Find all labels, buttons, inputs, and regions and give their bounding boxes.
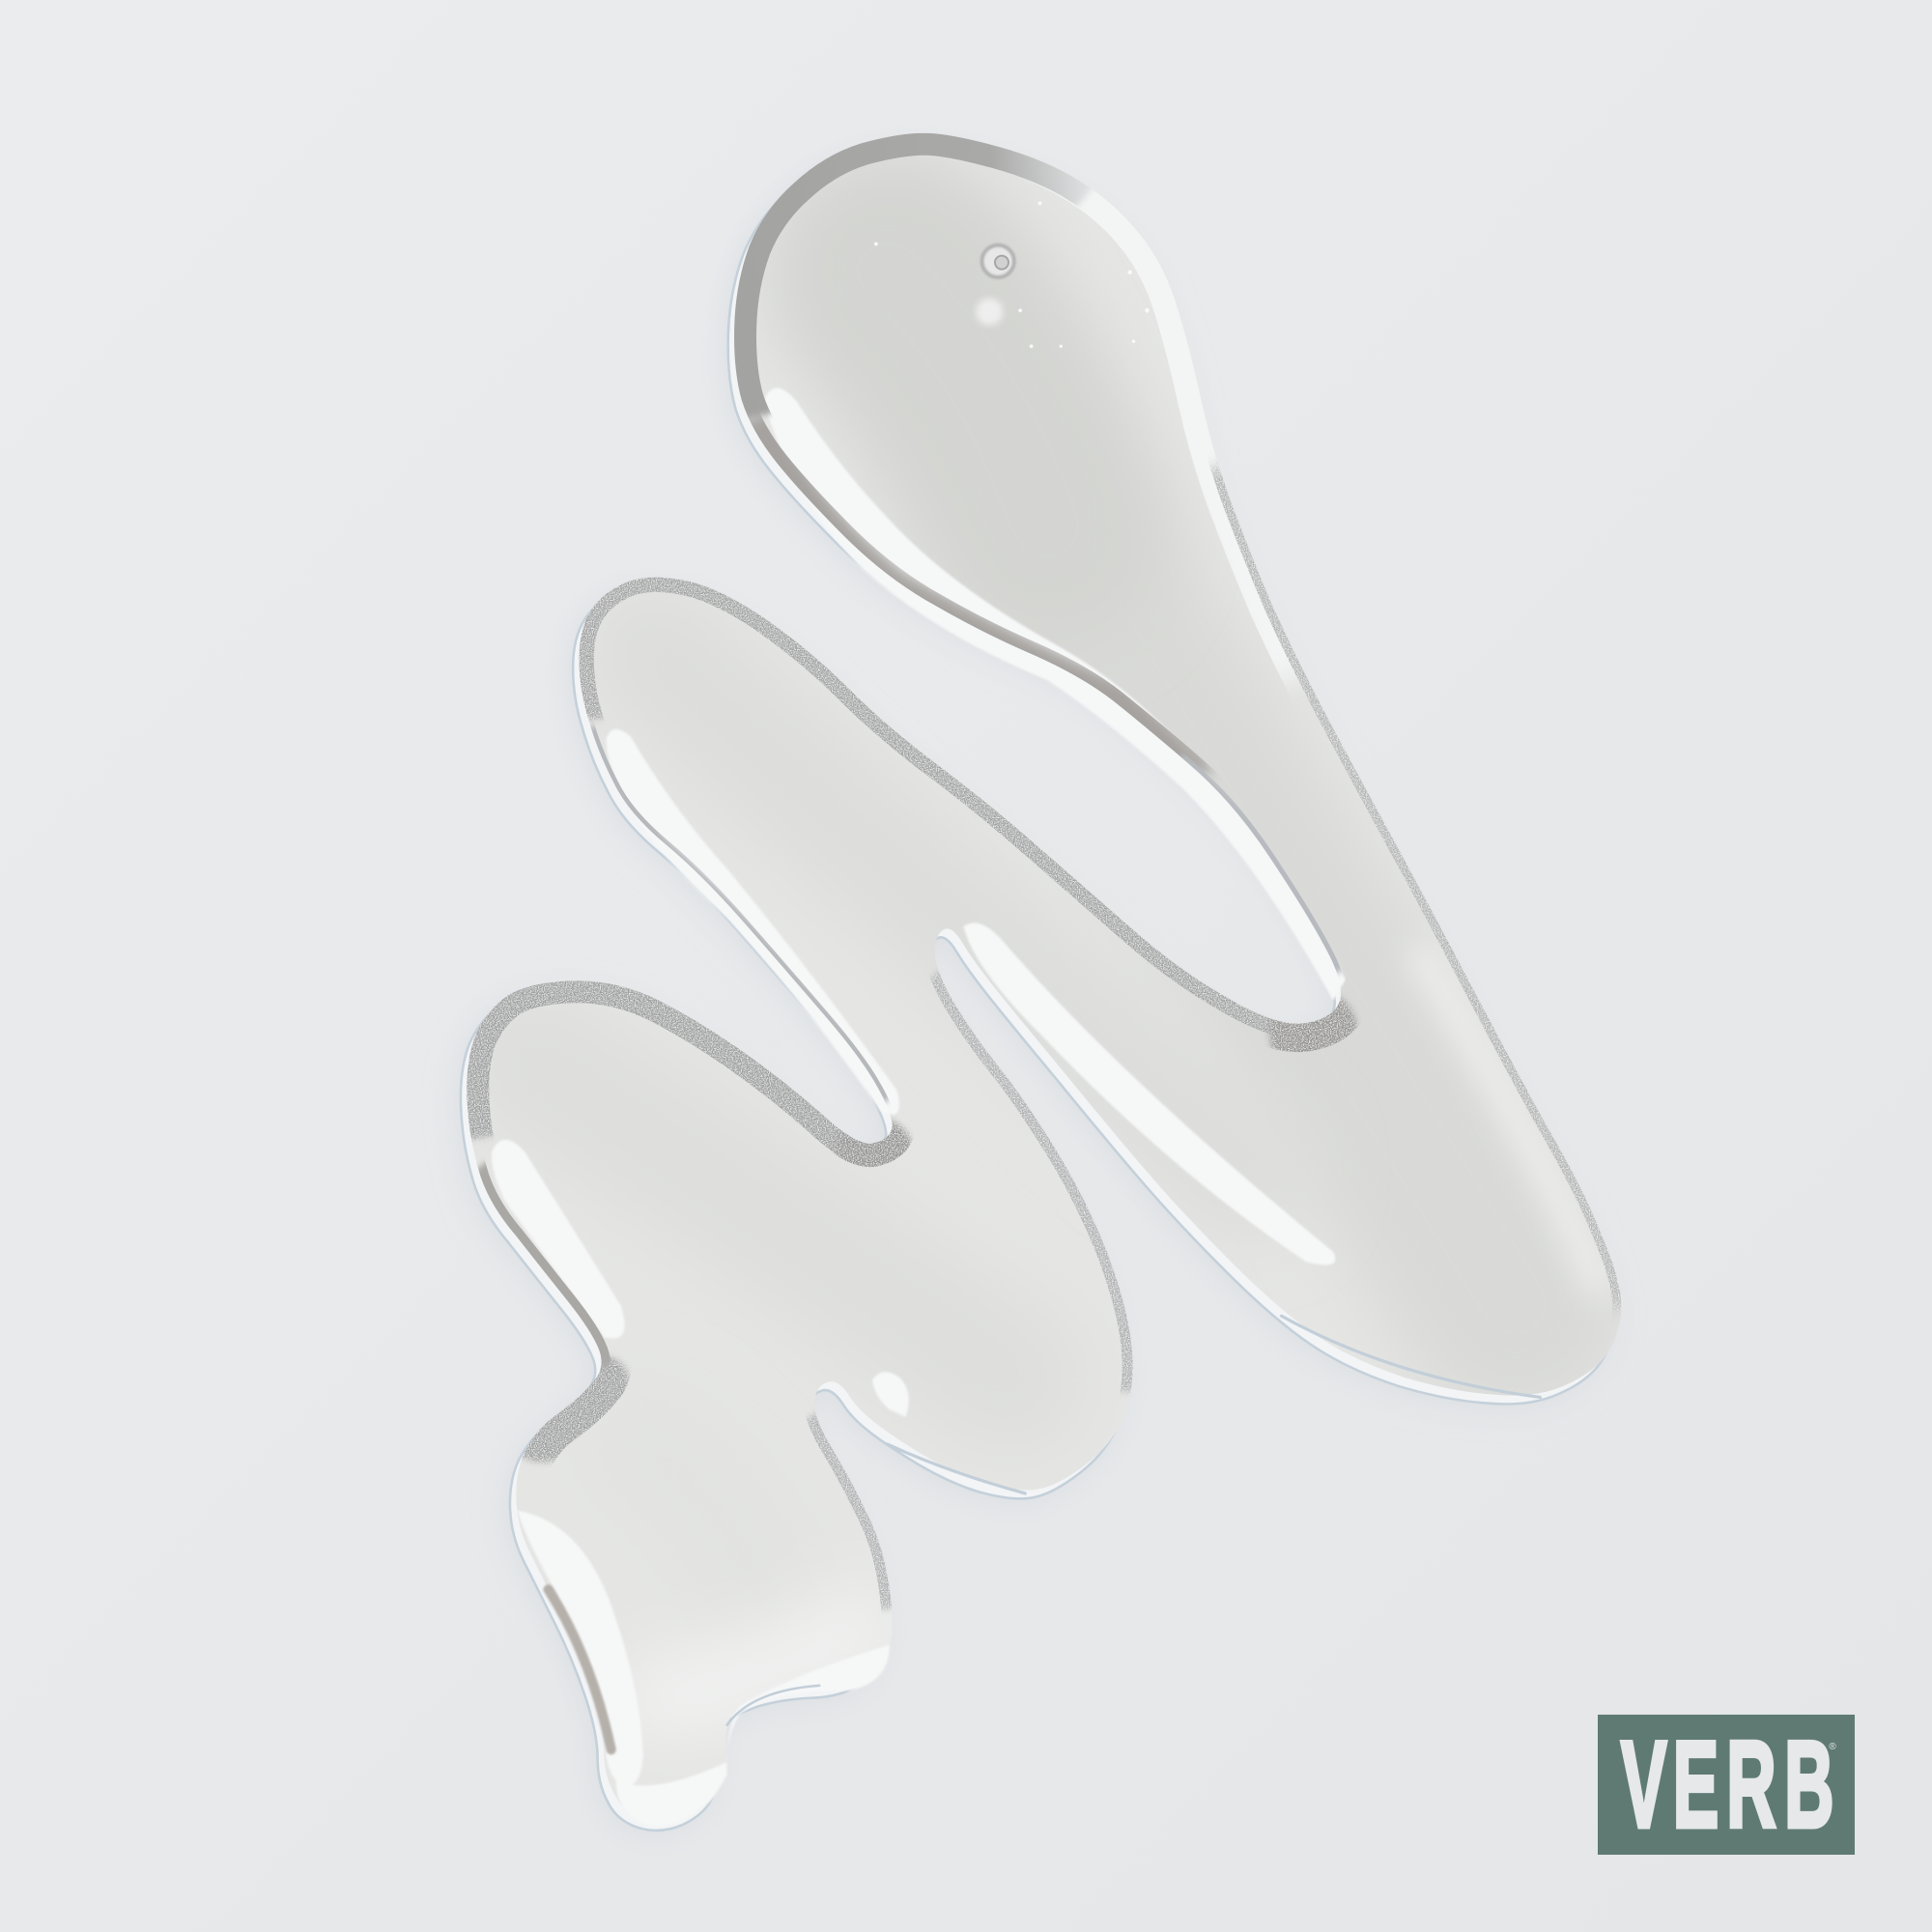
rim: lower lobe left edge: [467, 133, 1621, 1822]
gel swatch: [457, 133, 1621, 1834]
rim: right edge of long lobe: [467, 133, 1621, 1822]
rim: middle lobe top: [467, 133, 1621, 1822]
rim: mid lobe lower-left valley: [467, 133, 1621, 1822]
rim: bottom edge: [1282, 1316, 1540, 1397]
sparkles: [874, 202, 1150, 348]
logo: VERB badge: [1598, 1715, 1855, 1855]
silver rims: [467, 133, 1621, 1613]
outer blue-silver rim: [461, 142, 1615, 1831]
highlight: middle lobe lower: [963, 923, 1335, 1265]
bubble: [982, 245, 1014, 277]
white highlights: [492, 388, 1346, 1826]
highlight: small droplet: [872, 1372, 909, 1417]
rim: tail left edge: [549, 1589, 611, 1749]
rim: white upper right band: [1039, 185, 1296, 686]
interior shading: [529, 271, 1602, 1700]
highlight: tail: [518, 1511, 643, 1787]
logo wordmark: VERB: [1621, 1716, 1833, 1853]
product swatch image with logo: [460, 133, 1855, 1855]
registered mark: ®: [1829, 1742, 1836, 1752]
highlight: lower lobe left: [492, 1140, 625, 1339]
rim: lower valley lump: [467, 133, 1621, 1822]
highlight: middle lobe left: [607, 729, 899, 1115]
air bubble: [874, 202, 1150, 348]
bubble reflection: [976, 298, 1003, 326]
highlight: tail foot: [616, 1645, 890, 1826]
gel body: [467, 133, 1621, 1822]
rim: lower lobe top: [467, 133, 1621, 1822]
rim: middle valley lump: [467, 133, 1621, 1822]
rim: lower valley left: [467, 133, 1621, 1822]
rim: top lobe lower right edge: [1180, 753, 1343, 976]
soft drop shadow: [457, 146, 1611, 1834]
rim: top lobe arc: [734, 133, 1092, 419]
rim: waist lump: [467, 133, 1621, 1822]
rim: middle lobe left edge: [467, 133, 1621, 1822]
highlight: top lobe: [764, 388, 1346, 1001]
rim: top lobe lower edge: [748, 413, 1215, 779]
